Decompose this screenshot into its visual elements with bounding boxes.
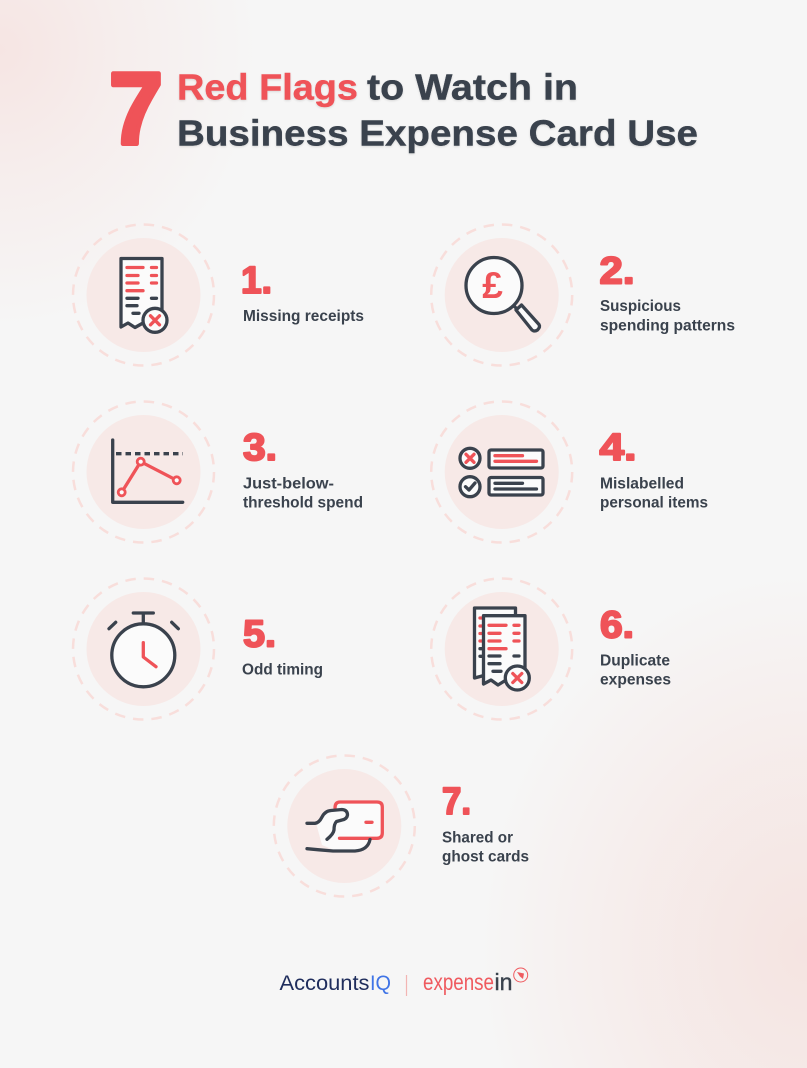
icon: hand holding card bbox=[274, 756, 415, 896]
footer logos bbox=[280, 968, 528, 996]
label 4: Mislabelled bbox=[600, 475, 684, 492]
number 5: 5. bbox=[243, 614, 276, 656]
number 6: 6. bbox=[600, 604, 634, 646]
icon: duplicate receipts with cross bbox=[431, 578, 572, 720]
footer logos: in bbox=[494, 969, 512, 995]
logo: AccountsIQ: Accounts bbox=[280, 972, 370, 995]
item 2: suspicious spending patterns: spending patterns bbox=[600, 318, 735, 334]
item 4: mislabelled personal items bbox=[431, 402, 708, 542]
footer logos: IQ bbox=[370, 972, 391, 995]
number 2: 2. bbox=[600, 250, 634, 292]
label 1: Missing receipts bbox=[243, 308, 364, 325]
logo mark bbox=[514, 968, 528, 982]
item 6: duplicate expenses: expenses bbox=[600, 672, 671, 689]
number 7: 7. bbox=[442, 781, 471, 823]
item 7: shared or ghost cards: ghost cards bbox=[442, 849, 529, 866]
item 4: mislabelled personal items: personal items bbox=[600, 495, 708, 512]
number 4: 4. bbox=[600, 427, 636, 469]
label 7: Shared or bbox=[442, 829, 513, 846]
logo: expensein: expense bbox=[423, 969, 494, 995]
title bbox=[109, 52, 698, 166]
item 3: just-below-threshold spend bbox=[73, 402, 363, 542]
label 3: Just-below- bbox=[243, 475, 334, 492]
icon: line chart under threshold bbox=[73, 402, 214, 542]
item 6: duplicate expenses bbox=[431, 578, 671, 720]
icon: receipt with cross bbox=[73, 224, 214, 366]
item 2: suspicious spending patterns bbox=[431, 224, 735, 366]
item 3: just-below-threshold spend: threshold spend bbox=[243, 495, 363, 512]
item 7: shared or ghost cards bbox=[274, 756, 529, 896]
icon: magnifier with pound sign: £ bbox=[482, 265, 503, 306]
label 6: Duplicate bbox=[600, 652, 670, 669]
title line two: Business Expense Card Use bbox=[177, 112, 698, 154]
icon: magnifier with pound sign bbox=[431, 224, 572, 366]
icon: stopwatch bbox=[73, 578, 214, 720]
item 5: odd timing bbox=[73, 578, 323, 720]
title line one: to Watch in bbox=[367, 66, 578, 108]
item 1: missing receipts bbox=[73, 224, 364, 366]
big number 7: 7 bbox=[109, 52, 163, 166]
label 5: Odd timing bbox=[242, 661, 323, 678]
label 2: Suspicious bbox=[600, 298, 681, 315]
title accent: Red Flags: Red Flags bbox=[177, 66, 358, 108]
icon: checklist with cross and tick bbox=[431, 402, 572, 542]
number 3: 3. bbox=[243, 427, 277, 469]
number 1: 1. bbox=[241, 260, 272, 302]
